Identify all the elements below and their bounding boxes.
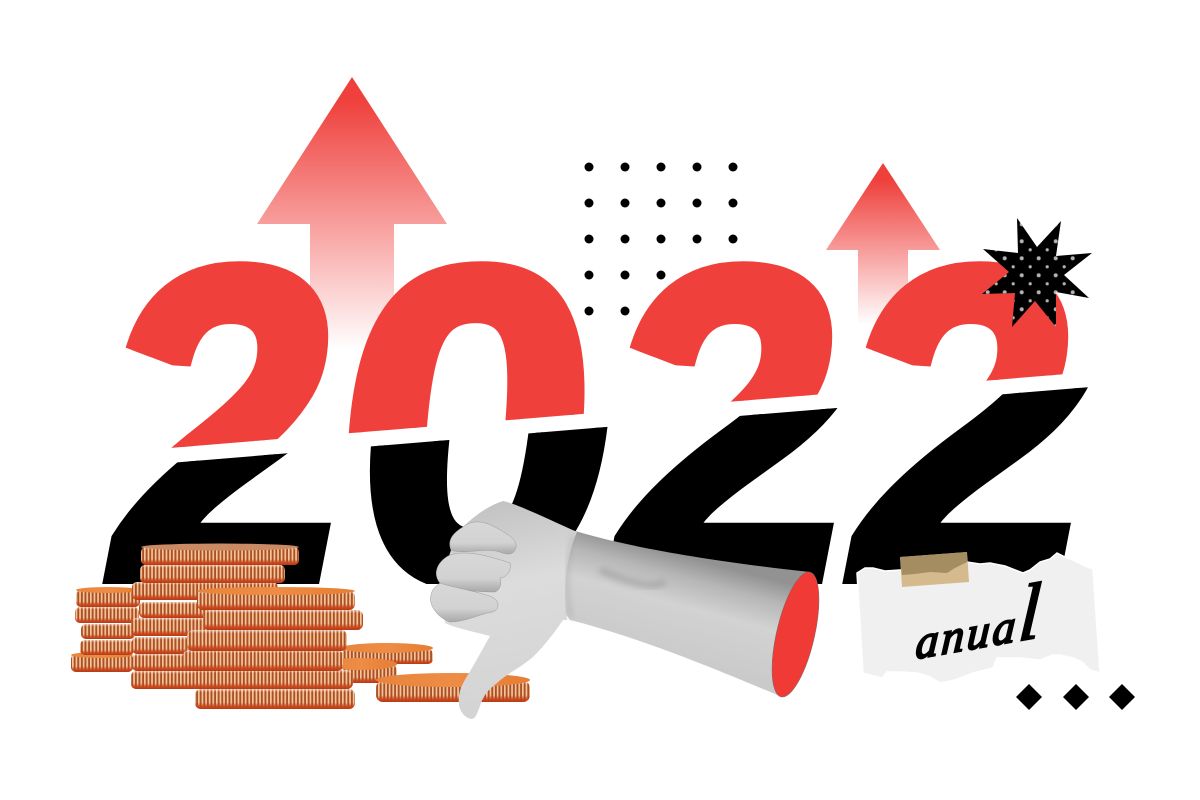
front coin stack — [183, 587, 363, 709]
red cut sleeve — [763, 568, 828, 701]
three black diamonds — [1016, 684, 1135, 710]
handwritten label: anual — [914, 566, 1047, 677]
fingers — [430, 522, 516, 622]
paper sheet — [857, 553, 1100, 683]
hand and thumb — [440, 501, 577, 719]
thumbs-down arm — [430, 501, 828, 719]
flat coins — [323, 643, 530, 702]
year 2022 lower black half — [102, 387, 1088, 584]
year 2022 upper red half — [126, 261, 1068, 448]
dot grid — [584, 162, 738, 316]
year 2022 lower black half: 2 — [77, 177, 408, 674]
year 2022 upper red half: 0 — [317, 177, 616, 674]
wrist crease — [567, 535, 574, 618]
torn paper note — [857, 552, 1100, 683]
forearm — [550, 530, 810, 697]
coin pile — [71, 544, 530, 709]
large gradient up arrow — [257, 77, 447, 352]
year 2022 lower black half: 0 — [331, 178, 650, 675]
icon: black polka dot star — [982, 218, 1092, 327]
year 2022 upper red half: 2 — [69, 177, 366, 674]
left coin stack — [71, 587, 140, 672]
middle coin stack — [131, 544, 299, 689]
year 2022 lower black half: 2 — [817, 177, 1148, 674]
year 2022 lower black half: 2 — [580, 177, 911, 674]
year 2022 upper red half: 2 — [809, 177, 1106, 674]
forearm vein shadow — [600, 570, 665, 585]
year 2022 upper red half: 2 — [573, 177, 870, 674]
small gradient up arrow — [826, 163, 940, 326]
masking tape — [900, 552, 969, 587]
